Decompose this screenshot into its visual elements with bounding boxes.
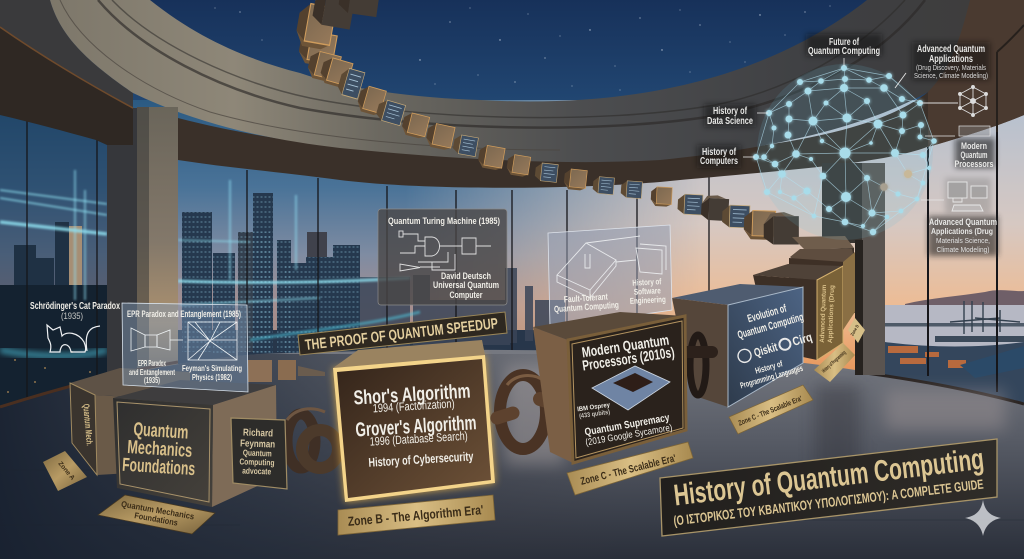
icon: molecule network — [920, 86, 988, 116]
plaque: small history of programming languages — [814, 343, 855, 382]
glass panel: fault-tolerant quantum computing: History of — [632, 276, 662, 288]
plaque: quantum mechanics foundations on floor — [98, 495, 215, 534]
block A: quantum mechanics foundations — [113, 380, 277, 507]
block C: modern quantum processors: Quantum Supremacy — [584, 412, 671, 438]
label: Schrödinger's cat paradox with cat outline — [30, 301, 120, 352]
column behind network sphere — [822, 163, 885, 375]
label: advanced quantum applications top: Advanced Quantum — [917, 44, 985, 55]
plaque: Richard Feynman: Feynman — [240, 438, 275, 451]
label: advanced quantum applications with computer icon: Climate Modeling) — [936, 245, 990, 254]
label: modern quantum processors with chip icon — [925, 126, 995, 170]
block C: modern quantum processors: (433 qubits) — [579, 409, 610, 420]
icon: sparkle watermark — [965, 500, 1001, 536]
block B: algorithm era with glowing frame: Shor's Algorithm — [353, 380, 471, 410]
block B: algorithm era with glowing frame: 1996 (Database Search) — [369, 429, 468, 449]
plaque: Richard Feynman: Richard — [243, 427, 273, 440]
background: concrete ceiling ring — [50, 0, 970, 162]
chain link between blocks B and C — [497, 375, 560, 449]
glass panel: EPR paradox and Feynman simulation: (1935) — [144, 375, 160, 385]
glass panel: fault-tolerant quantum computing: Quantum Computing — [554, 300, 619, 314]
plaque: Richard Feynman: Quantum — [243, 447, 272, 459]
glass panel: quantum turing machine: Universal Quantum — [433, 280, 499, 291]
label: modern quantum processors with chip icon: Processors — [954, 159, 994, 170]
banner: the proof of quantum speedup: THE PROOF OF QUANTUM SPEEDUP — [304, 315, 499, 354]
glass panel: EPR paradox and Feynman simulation: Feyman's Simulating — [182, 363, 242, 373]
plaque: Richard Feynman: Computing — [239, 456, 275, 468]
block B: algorithm era with glowing frame: History of Cybersecurity — [368, 449, 474, 470]
label: advanced quantum applications with computer icon: Advanced Quantum — [929, 217, 997, 228]
background: window mullions — [27, 115, 997, 400]
chain link between blocks A and B — [287, 409, 338, 468]
label: history of data science — [704, 104, 768, 127]
plaque: zone C dark scalable era — [729, 385, 813, 434]
back block: hidden foundations block: Quantum Mech. — [81, 403, 95, 446]
background: night sky with stars — [0, 0, 1024, 200]
block 4: evolution of quantum computing: Programming Languages — [739, 363, 804, 390]
glass panel: quantum turing machine: Computer — [450, 290, 483, 301]
label: Schrödinger's cat paradox with cat outline: Schrödinger's Cat Paradox — [30, 301, 120, 312]
label: Schrödinger's cat paradox with cat outline: (1935) — [61, 311, 83, 321]
label: advanced quantum applications top — [895, 42, 990, 88]
block B: algorithm era with glowing frame: Grover's Algorithm — [355, 412, 477, 441]
glass panel: quantum turing machine — [378, 209, 507, 305]
plaque: small tilted tag — [848, 318, 865, 343]
plaque: Richard Feynman — [231, 418, 287, 489]
glass panel: EPR paradox and Feynman simulation: and Entanglement — [129, 367, 175, 377]
floor — [0, 350, 1024, 559]
block 4: evolution of quantum computing: History of — [754, 358, 784, 376]
label: future of quantum computing: Future of — [829, 37, 859, 48]
chain of floating cubes — [294, 0, 799, 245]
background: dark wall panel beside left column — [107, 108, 137, 393]
block 4: evolution of quantum computing: Evolution of — [746, 303, 788, 325]
block C: modern quantum processors: Modern Quantum — [581, 333, 670, 361]
block 4: evolution of quantum computing — [672, 284, 814, 407]
label: advanced quantum applications with computer icon: Applications (Drug — [931, 226, 993, 236]
background: glowing data streaks over city — [0, 170, 420, 356]
background: soffit under concrete ring — [0, 0, 1024, 188]
background: harbour view — [885, 290, 1024, 408]
plaque: quantum mechanics foundations on floor: Quantum Mechanics — [120, 499, 195, 521]
label: history of data science: History of — [713, 106, 747, 117]
glass panel: EPR paradox and Feynman simulation: Physics (1982) — [192, 372, 232, 382]
glass panel: EPR paradox and Feynman simulation — [122, 303, 248, 392]
label: advanced quantum applications top: (Drug Discovery, Materials — [916, 63, 986, 72]
plaque: foundations small tilted: Zone A — [56, 460, 76, 482]
plaque: small history of programming languages: History of Programming — [821, 350, 847, 375]
block A: quantum mechanics foundations: Quantum — [133, 419, 189, 444]
label: advanced quantum applications with computer icon — [921, 178, 998, 256]
label: advanced quantum applications top: Science, Climate Modeling) — [914, 71, 988, 80]
label: future of quantum computing — [806, 34, 882, 66]
block C: modern quantum processors — [533, 312, 686, 463]
background: city skyline — [0, 193, 628, 413]
title banner — [660, 439, 997, 536]
block A: quantum mechanics foundations: Foundations — [122, 455, 196, 480]
glass panel: quantum turing machine: David Deutsch — [441, 271, 491, 282]
block A: quantum mechanics foundations: Mechanics — [127, 437, 193, 462]
back block: hidden foundations block — [70, 368, 190, 475]
large cube stack near right column: Advanced Quantum — [819, 284, 828, 343]
block C: modern quantum processors: Processors (2010s) — [581, 345, 676, 375]
glass panel: EPR paradox and Feynman simulation: EPR Paradox and Entanglement (1985) — [127, 309, 241, 320]
plaque: small tilted tag: Zone D — [850, 323, 860, 337]
large cube stack near right column: Applications (Drug — [827, 285, 836, 343]
plaque: zone C the scalable era — [567, 442, 693, 495]
quantum network sphere — [753, 64, 937, 240]
banner: the proof of quantum speedup — [298, 312, 507, 355]
glass panel: fault-tolerant quantum computing — [548, 225, 672, 328]
block 4: evolution of quantum computing: Qiskit — [752, 340, 779, 360]
small cubes on far floor — [248, 360, 325, 382]
block 4: evolution of quantum computing: Cirq — [791, 330, 814, 349]
glass panel: EPR paradox and Feynman simulation: EPR Paradox — [138, 358, 166, 368]
chain link behind block C — [685, 335, 712, 395]
block B: algorithm era with glowing frame: 1994 (Factorization) — [372, 396, 455, 415]
block B: algorithm era with glowing frame — [333, 340, 495, 502]
plaque: zone B the algorithm era: Zone B - The Algorithm Era' — [347, 502, 484, 529]
label: history of computers: Computers — [700, 156, 738, 167]
plaque: Richard Feynman: advocate — [242, 465, 272, 476]
plaque: quantum mechanics foundations on floor: Foundations — [134, 510, 179, 528]
label: future of quantum computing: Quantum Computing — [808, 46, 880, 57]
plaque: zone B the algorithm era — [338, 495, 495, 535]
glass panel: quantum turing machine: Quantum Turing Machine (1985) — [388, 216, 500, 227]
block C: modern quantum processors: (2019 Google Sycamore) — [585, 422, 673, 448]
glass panel: fault-tolerant quantum computing: Engineering — [630, 294, 666, 306]
background: windows with sunset and dusk — [0, 100, 1024, 370]
label: advanced quantum applications with computer icon: Materials Science, — [936, 236, 990, 245]
label: modern quantum processors with chip icon: Modern — [961, 141, 987, 152]
label: history of computers: History of — [702, 147, 736, 158]
label: history of data science: Data Science — [707, 116, 753, 127]
label: history of computers — [697, 145, 755, 168]
plaque: zone C the scalable era: Zone C - The Scalable Era' — [579, 452, 677, 488]
left column — [137, 107, 178, 377]
plaque: zone C dark scalable era: Zone C - The Scalable Era' — [737, 394, 803, 428]
glass panel: fault-tolerant quantum computing: Software — [634, 285, 661, 297]
plaque: foundations small tilted — [43, 451, 87, 491]
block 4: evolution of quantum computing: Quantum Computing — [736, 311, 805, 342]
label: advanced quantum applications top: Applications — [929, 54, 973, 65]
label: modern quantum processors with chip icon: Quantum — [960, 150, 988, 161]
glass panel: fault-tolerant quantum computing: Fault-Tolerant — [563, 291, 608, 305]
block C: modern quantum processors: IBM Osprey — [577, 402, 611, 413]
large cube stack near right column — [753, 236, 855, 360]
